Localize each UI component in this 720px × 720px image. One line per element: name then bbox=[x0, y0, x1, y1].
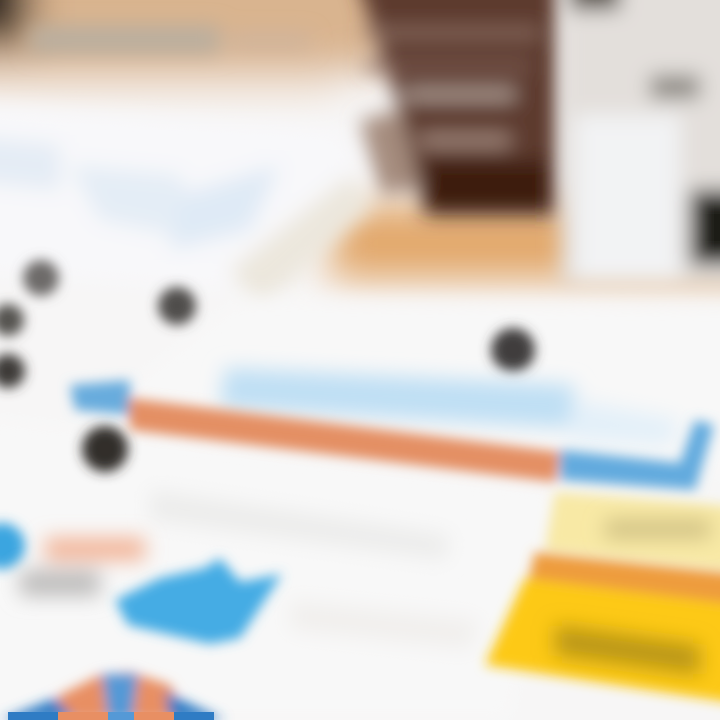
orange and blue banner bbox=[70, 380, 714, 490]
right side object bbox=[560, 0, 720, 285]
wooden desk background bbox=[0, 0, 720, 280]
lower paper sheet bbox=[0, 298, 720, 720]
dark book stack bbox=[350, 0, 560, 215]
yellow panel bbox=[485, 492, 720, 710]
left blue circle bbox=[0, 523, 25, 569]
bottom pie chart bbox=[0, 672, 225, 720]
pale blue title band bbox=[220, 368, 680, 445]
upper paper sheet bbox=[0, 100, 375, 310]
blurred body text lines bbox=[150, 490, 480, 650]
small heading blocks bbox=[20, 538, 145, 596]
blue chart shape bbox=[115, 558, 282, 644]
black dots bbox=[0, 260, 535, 472]
yellow panel dark text bbox=[555, 520, 710, 675]
blurred header text bbox=[30, 26, 310, 54]
